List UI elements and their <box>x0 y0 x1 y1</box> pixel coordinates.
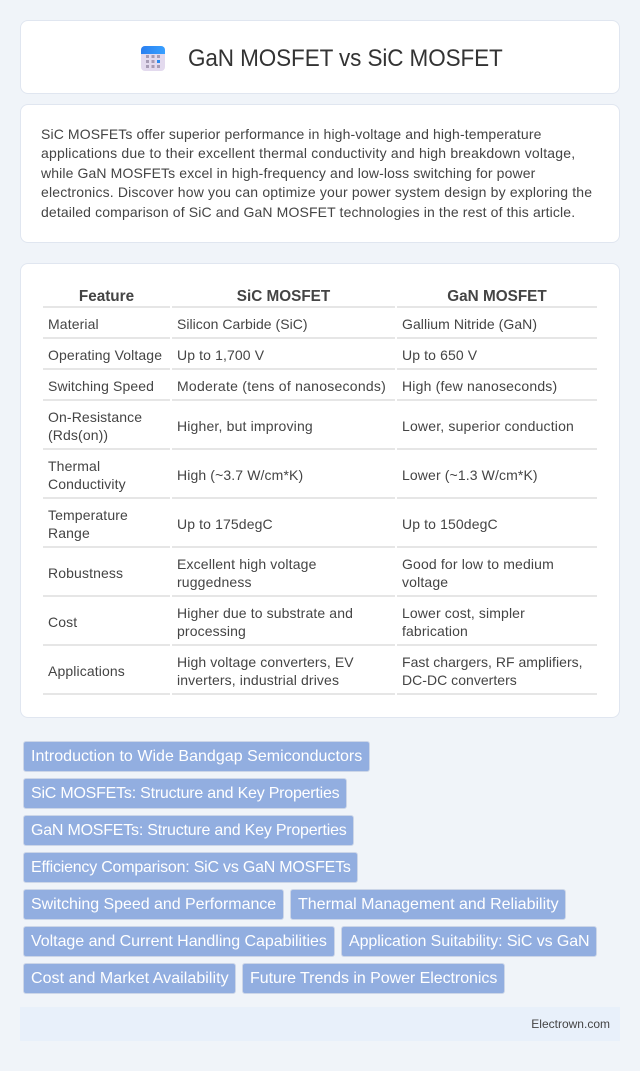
text block: introduction: applications due to their excellent thermal conductivity and high breakdown voltage, <box>41 145 575 161</box>
comparison table: Switching Speed <box>48 378 154 394</box>
topic chip: efficiency: Efficiency Comparison: SiC vs GaN MOSFETs <box>31 859 351 876</box>
comparison table: Up to 650 V <box>402 346 477 362</box>
comparison table: Material <box>48 316 99 332</box>
comparison table: Higher due to substrate and <box>177 604 353 620</box>
comparison table: fabrication <box>402 622 468 638</box>
topic chip: thermal management <box>290 889 566 920</box>
topic chip: SiC structure <box>23 778 347 809</box>
text block: introduction: detailed comparison of SiC and GaN MOSFET technologies in the rest of this article. <box>41 204 575 220</box>
comparison table: Lower cost, simpler <box>402 604 525 620</box>
comparison table: Conductivity <box>48 476 126 492</box>
comparison table: Moderate (tens of nanoseconds) <box>177 378 386 394</box>
comparison table: High voltage converters, EV <box>177 654 354 670</box>
comparison table: On-Resistance <box>48 408 142 424</box>
topic chip: switching speed <box>23 889 284 920</box>
topic chip: GaN structure: GaN MOSFETs: Structure and Key Properties <box>31 822 347 839</box>
topic chip: application suitability: Application Suitability: SiC vs GaN <box>349 933 590 950</box>
comparison table: Applications <box>48 662 125 678</box>
text block: introduction <box>41 126 592 220</box>
comparison table: processing <box>177 622 246 638</box>
comparison table: DC-DC converters <box>402 672 517 688</box>
comparison table: Operating Voltage <box>48 346 162 362</box>
panel: title card <box>20 20 620 94</box>
comparison table: Up to 150degC <box>402 516 498 532</box>
topic chip: voltage and current <box>23 926 335 957</box>
topic chip: thermal management: Thermal Management and Reliability <box>298 896 559 913</box>
comparison table: High (~3.7 W/cm*K) <box>177 466 303 482</box>
comparison table: (Rds(on)) <box>48 426 108 442</box>
comparison table: Good for low to medium <box>402 556 554 572</box>
comparison table: ruggedness <box>177 574 252 590</box>
comparison table: voltage <box>402 574 448 590</box>
text block: introduction: while GaN MOSFETs excel in high-frequency and low-loss switching for power <box>41 165 535 181</box>
comparison table: Temperature <box>48 506 128 522</box>
topic chip: introduction: Introduction to Wide Bandgap Semiconductors <box>31 748 362 765</box>
footer: Electrown.com <box>531 1017 610 1031</box>
panel: introduction card <box>20 104 620 243</box>
comparison table: Cost <box>48 614 77 630</box>
title: GaN MOSFET vs SiC MOSFET <box>188 45 503 72</box>
comparison table: Higher, but improving <box>177 418 313 434</box>
comparison table: Silicon Carbide (SiC) <box>177 316 308 332</box>
comparison table: Excellent high voltage <box>177 556 316 572</box>
text block: introduction: electronics. Discover how you can optimize your power system design by exploring the <box>41 184 592 200</box>
topic chip: cost: Cost and Market Availability <box>31 970 229 987</box>
topic chip: cost <box>23 963 236 994</box>
topic chip: GaN structure <box>23 815 354 846</box>
comparison table: SiC MOSFET <box>237 288 330 305</box>
comparison table: High (few nanoseconds) <box>402 378 557 394</box>
comparison table <box>43 288 597 695</box>
comparison table: Range <box>48 524 90 540</box>
panel: comparison table card <box>20 263 620 718</box>
comparison table: Up to 1,700 V <box>177 346 264 362</box>
topic chip: efficiency <box>23 852 358 883</box>
comparison table: Thermal <box>48 458 100 474</box>
footer <box>20 1007 620 1041</box>
topic chip: future trends <box>242 963 505 994</box>
topic chip: SiC structure: SiC MOSFETs: Structure and Key Properties <box>31 785 339 802</box>
comparison table: Lower (~1.3 W/cm*K) <box>402 466 538 482</box>
topic chip: application suitability <box>341 926 597 957</box>
comparison table: GaN MOSFET <box>447 288 547 305</box>
topic chip: future trends: Future Trends in Power Electronics <box>250 970 497 987</box>
topic chip: introduction <box>23 741 370 772</box>
icon: calendar <box>141 46 165 71</box>
comparison table: Up to 175degC <box>177 516 273 532</box>
topic chip: switching speed: Switching Speed and Performance <box>31 896 276 913</box>
comparison table: Fast chargers, RF amplifiers, <box>402 654 583 670</box>
text block: introduction: SiC MOSFETs offer superior performance in high-voltage and high-temperature <box>41 126 542 142</box>
comparison table: Feature <box>79 288 134 305</box>
comparison table: inverters, industrial drives <box>177 672 339 688</box>
topic chip: voltage and current: Voltage and Current Handling Capabilities <box>31 933 327 950</box>
comparison table: Gallium Nitride (GaN) <box>402 316 537 332</box>
comparison table: Lower, superior conduction <box>402 418 574 434</box>
comparison table: Robustness <box>48 564 123 580</box>
